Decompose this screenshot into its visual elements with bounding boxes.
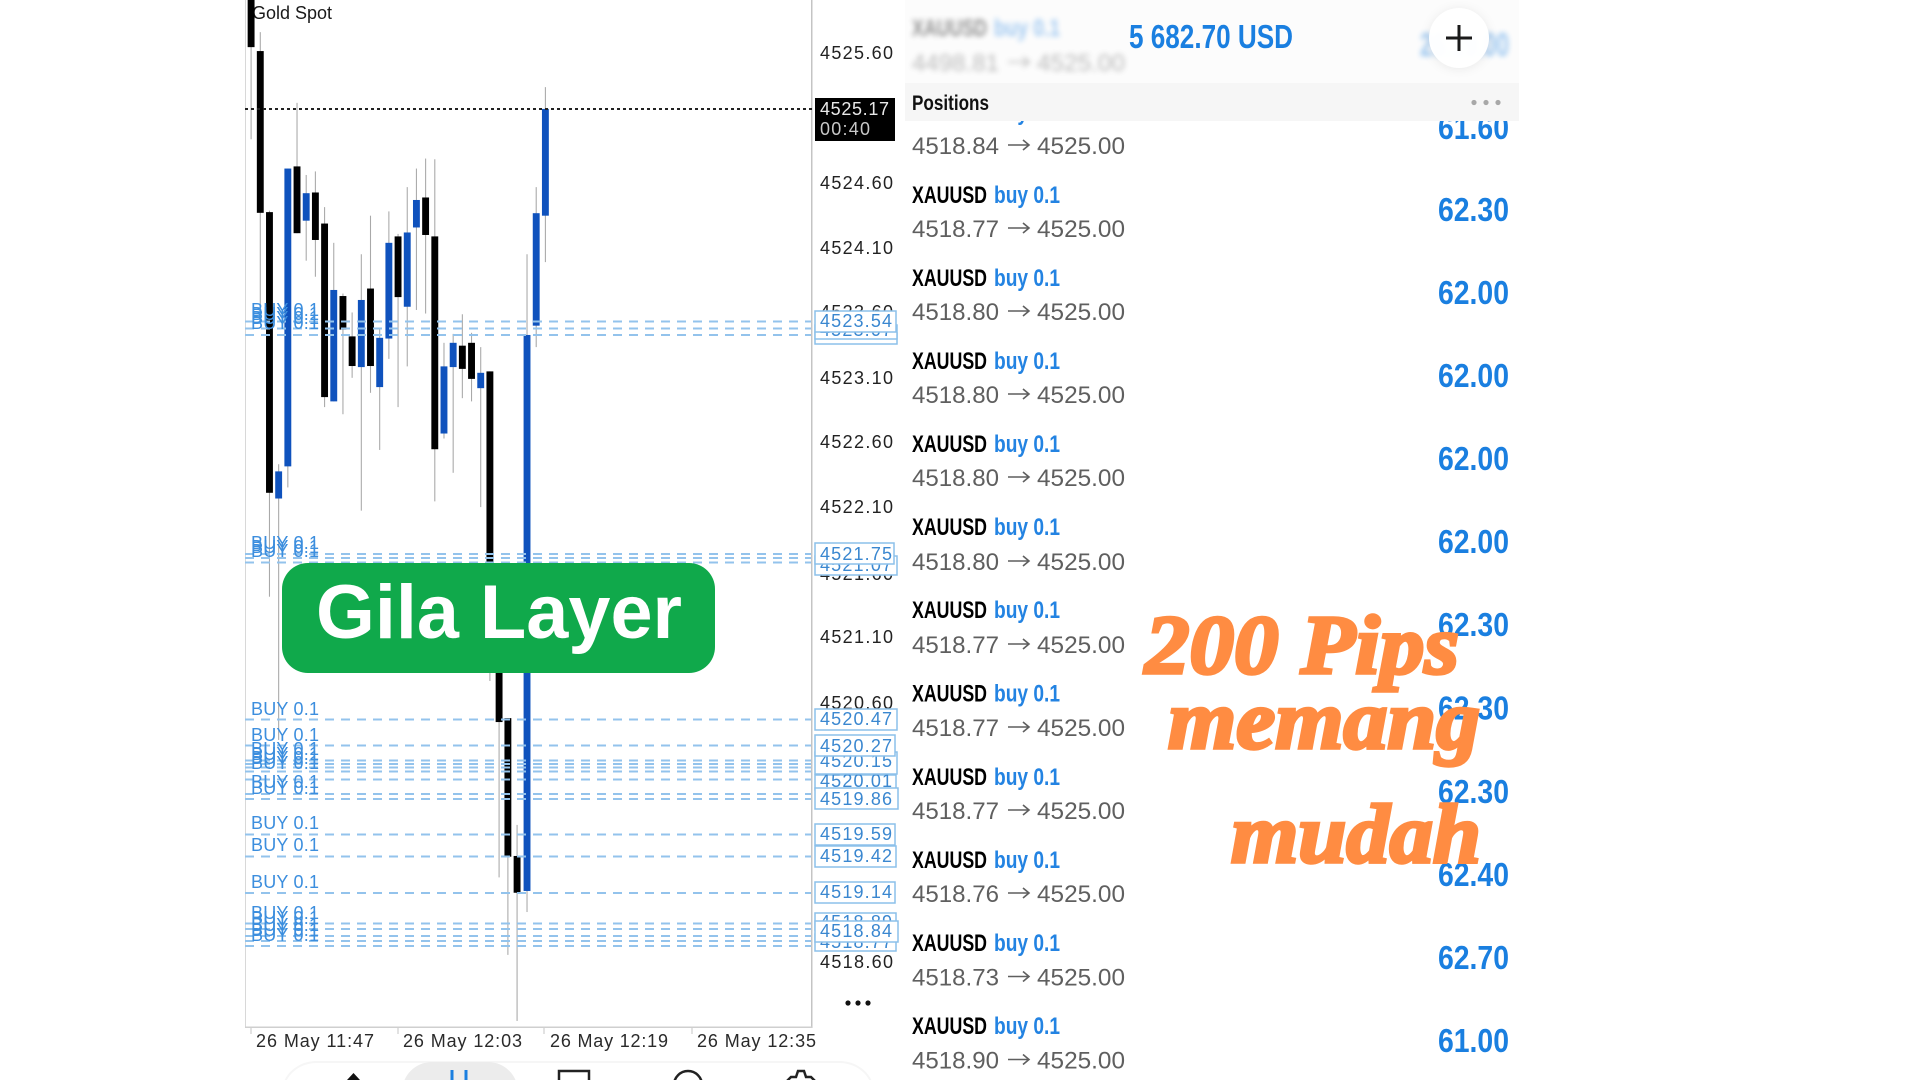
order price tags: 4523.07	[820, 320, 892, 340]
panel: positions list	[905, 0, 1519, 1074]
row: 62.00: XAUUSD	[912, 431, 987, 458]
row: 62.00: 62.00	[1438, 523, 1509, 560]
order price tags	[815, 311, 898, 952]
row: 61.60: buy 0.1	[994, 99, 1060, 126]
row: 62.30	[912, 182, 1509, 243]
row: 62.00	[912, 265, 1509, 326]
buy order labels: BUY 0.1	[251, 748, 319, 768]
row: 62.30: buy 0.1	[994, 182, 1060, 209]
row: 61.00: 4518.90	[912, 1048, 999, 1074]
positions header bar: Positions	[912, 92, 989, 115]
order price tags: 4519.42	[820, 846, 892, 866]
price axis labels: 4523.10	[820, 368, 893, 388]
buy order labels: BUY 0.1	[251, 313, 319, 333]
time axis labels: 26 May 12:35	[697, 1031, 816, 1051]
order price tags: 4521.75	[820, 544, 892, 564]
row: 61.00: 4525.00	[1037, 1048, 1125, 1074]
row: 62.70: 4525.00	[1037, 964, 1125, 992]
current price tag: 00:40	[820, 119, 870, 139]
row: 62.30: 4518.77	[912, 632, 999, 659]
buy order dashed lines	[245, 322, 811, 946]
time axis labels: 26 May 12:03	[403, 1031, 522, 1051]
row: 62.00: buy 0.1	[994, 514, 1060, 541]
buy order labels: BUY 0.1	[251, 915, 319, 935]
row: 62.30: buy 0.1	[994, 680, 1060, 708]
buy order labels: BUY 0.1	[251, 533, 319, 553]
row: 62.30: 4525.00	[1037, 798, 1125, 825]
row: 62.30: XAUUSD	[912, 764, 987, 791]
row: 62.00: 62.00	[1438, 357, 1509, 394]
price axis labels: 4522.60	[820, 432, 893, 452]
price axis labels: 4518.60	[820, 952, 893, 972]
order price tags: 4518.84	[820, 921, 892, 941]
order price tags: 4518.77	[820, 932, 892, 952]
row: 62.40: XAUUSD	[912, 847, 987, 874]
headline: 200 Pips memang mudah: memang	[1168, 674, 1480, 767]
frosted top band with blurred row: XAUUSD	[912, 15, 987, 42]
time axis labels: 26 May 11:47	[256, 1031, 374, 1051]
row: 62.00	[912, 348, 1509, 409]
row: 62.30: 4525.00	[1037, 715, 1125, 742]
icon: trade	[559, 1071, 589, 1080]
buy order labels: BUY 0.1	[251, 872, 319, 892]
row: 62.00: buy 0.1	[994, 431, 1060, 458]
row: 62.30: 4518.77	[912, 798, 999, 825]
row: 62.30: 4525.00	[1037, 216, 1125, 243]
buy order labels: BUY 0.1	[251, 308, 319, 328]
badge: Gila Layer	[282, 563, 715, 673]
current price tag: 4525.17	[820, 99, 889, 119]
icon: chart	[452, 1070, 466, 1080]
row: 62.40: 4518.76	[912, 881, 999, 908]
buy order labels: BUY 0.1	[251, 753, 319, 773]
row: 62.30: 4518.77	[912, 715, 999, 742]
buy order labels: BUY 0.1	[251, 908, 319, 928]
bottom navigation bar	[283, 1062, 873, 1080]
row: 61.00: XAUUSD	[912, 1013, 987, 1040]
row: 62.70: 4518.73	[912, 964, 999, 992]
price axis labels: 4521.10	[820, 627, 893, 647]
buy order labels: BUY 0.1	[251, 835, 319, 855]
chart title: Gold Spot: Gold Spot	[252, 3, 332, 23]
price axis labels	[820, 43, 893, 972]
order price tags: 4520.01	[820, 771, 892, 791]
buy order labels: BUY 0.1	[251, 920, 319, 940]
row: 62.30: buy 0.1	[994, 597, 1060, 624]
buy order labels: BUY 0.1	[251, 537, 319, 557]
account balance: 5 682.70 USD	[1129, 18, 1293, 55]
order price tags: 4519.86	[820, 789, 892, 809]
row: 62.30: 62.30	[1438, 690, 1509, 726]
headline: 200 Pips memang mudah	[1143, 599, 1481, 881]
row: 62.00: 4518.80	[912, 382, 999, 409]
panel: trading chart	[245, 0, 898, 1051]
time axis labels: 26 May 12:19	[550, 1031, 668, 1051]
row: 62.30: XAUUSD	[912, 182, 987, 209]
row: 62.40	[912, 847, 1509, 908]
buy order labels: BUY 0.1	[251, 300, 319, 320]
icon: history	[674, 1071, 702, 1080]
row: 61.00: 61.00	[1438, 1022, 1509, 1059]
frosted top band with blurred row: 26.19.00	[1420, 26, 1509, 63]
frosted top band with blurred row: 4498.81	[912, 50, 999, 77]
row: 62.00	[912, 514, 1509, 576]
current price tag	[815, 98, 895, 141]
row: 62.30	[912, 764, 1509, 825]
frosted top band with blurred row: 4525.00	[1037, 50, 1125, 77]
row: 61.00: buy 0.1	[994, 1013, 1060, 1040]
buy order labels: BUY 0.1	[251, 744, 319, 764]
row: 61.60: 4525.00	[1037, 133, 1125, 160]
row: 62.00: 4518.80	[912, 465, 999, 492]
order price tags: 4520.15	[820, 751, 892, 771]
row: 62.00: 4525.00	[1037, 299, 1125, 326]
time axis labels	[256, 1031, 816, 1051]
icon: settings	[786, 1071, 816, 1080]
current price dotted line	[245, 108, 814, 110]
price axis labels: 4521.60	[820, 564, 893, 584]
price axis labels: 4523.60	[820, 302, 893, 322]
row: 62.70	[912, 930, 1509, 992]
row: 62.30: XAUUSD	[912, 597, 987, 624]
buy order labels: BUY 0.1	[251, 725, 319, 745]
row: 62.70: XAUUSD	[912, 930, 987, 957]
headline: 200 Pips memang mudah: mudah	[1231, 788, 1481, 881]
row: 62.00: buy 0.1	[994, 348, 1060, 375]
row: 62.00: 4525.00	[1037, 549, 1125, 576]
headline: 200 Pips memang mudah: 200 Pips	[1143, 599, 1459, 692]
order price tags: 4519.59	[820, 824, 892, 844]
buy order labels: BUY 0.1	[251, 903, 319, 923]
row: 62.00: 62.00	[1438, 274, 1509, 311]
row: 62.30	[912, 597, 1509, 659]
buy order labels: BUY 0.1	[251, 813, 319, 833]
row: 62.00: XAUUSD	[912, 514, 987, 541]
buy order labels: BUY 0.1	[251, 739, 319, 759]
row: 62.30: buy 0.1	[994, 764, 1060, 791]
order price tags: 4520.47	[820, 709, 892, 729]
row: 62.30: 62.30	[1438, 606, 1509, 643]
icon: quotes arrow	[347, 1073, 360, 1080]
row: 62.00: XAUUSD	[912, 348, 987, 375]
row: 62.40: 62.40	[1438, 856, 1509, 893]
price axis labels: 4522.10	[820, 497, 893, 517]
row: 62.00: XAUUSD	[912, 265, 987, 292]
row: 62.70: buy 0.1	[994, 930, 1060, 957]
frosted top band with blurred row: buy 0.1	[994, 15, 1060, 42]
row: 61.60	[912, 99, 1509, 160]
row: 62.00: 4518.80	[912, 299, 999, 326]
buy order labels: BUY 0.1	[251, 772, 319, 792]
active tab highlight	[402, 1062, 518, 1080]
row: 62.00: 62.00	[1438, 440, 1509, 477]
buy order labels: BUY 0.1	[251, 699, 319, 719]
buy order labels: BUY 0.1	[251, 541, 319, 561]
row: 62.00: 4518.80	[912, 549, 999, 576]
row: 62.30: 4518.77	[912, 216, 999, 243]
row: 62.30: 4525.00	[1037, 632, 1125, 659]
row: 61.00	[912, 1013, 1509, 1074]
candlesticks	[248, 0, 549, 1021]
price axis labels: 4520.60	[820, 693, 893, 713]
row: 61.60: XAUUSD	[912, 99, 987, 126]
order price tags: 4520.27	[820, 736, 892, 756]
positions header bar	[905, 83, 1519, 121]
row: 62.00	[912, 431, 1509, 492]
row: 61.60: 4518.84	[912, 133, 999, 160]
buy order labels	[251, 300, 319, 945]
row: 62.00: buy 0.1	[994, 265, 1060, 292]
row: 61.60: 61.60	[1438, 109, 1509, 146]
icon: add button	[1429, 8, 1489, 68]
more options dots	[845, 1000, 871, 1006]
order price tags: 4523.54	[820, 311, 892, 331]
price axis labels: 4524.10	[820, 238, 893, 258]
row: 62.30: 62.30	[1438, 191, 1509, 228]
row: 62.00: 4525.00	[1037, 465, 1125, 492]
buy order labels: BUY 0.1	[251, 778, 319, 798]
row: 62.40: buy 0.1	[994, 847, 1060, 874]
row: 62.30: XAUUSD	[912, 680, 987, 708]
row: 62.30: 62.30	[1438, 773, 1509, 810]
order price tags: 4519.14	[820, 882, 892, 902]
frosted top band with blurred row	[905, 0, 1519, 83]
row: 62.30	[912, 680, 1509, 742]
row: 62.00: 4525.00	[1037, 382, 1125, 409]
row: 62.40: 4525.00	[1037, 881, 1125, 908]
buy order labels: BUY 0.1	[251, 925, 319, 945]
price axis labels: 4524.60	[820, 173, 893, 193]
order price tags: 4521.07	[820, 555, 892, 575]
buy order labels: BUY 0.1	[251, 304, 319, 324]
price axis labels: 4525.60	[820, 43, 893, 63]
order price tags: 4518.89	[820, 912, 892, 932]
badge: Gila Layer: Gila Layer	[316, 570, 682, 655]
row: 62.70: 62.70	[1438, 939, 1509, 976]
